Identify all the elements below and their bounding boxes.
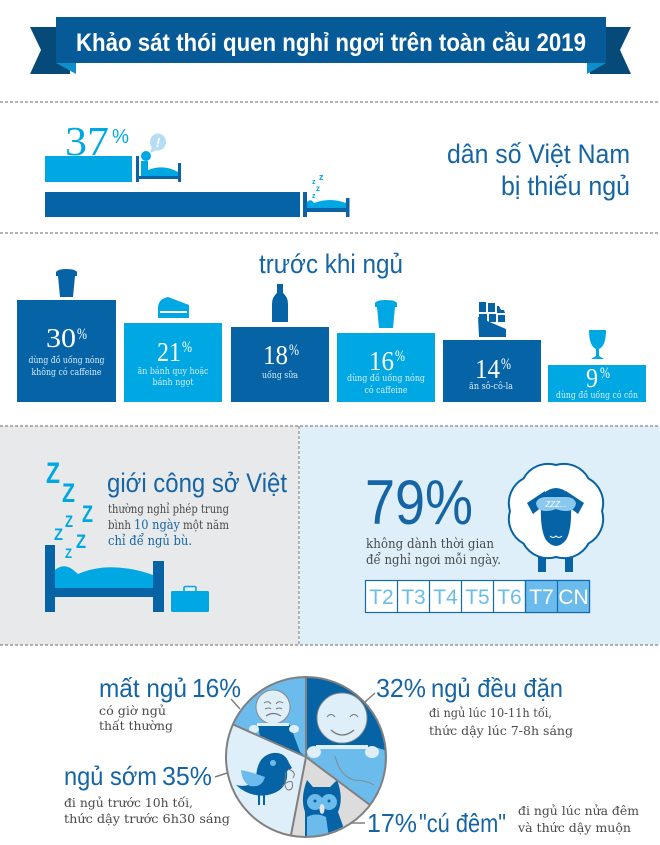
label: night owl 17 percent: đi ngủ lúc nửa đêm xyxy=(518,804,640,818)
text: leave days used for catch-up sleep: thường nghỉ phép trung xyxy=(108,502,229,516)
icon: floating Z letters: Z xyxy=(65,545,72,561)
dark bar full population xyxy=(45,192,300,217)
bar: 21 percent: % xyxy=(182,339,192,356)
heading: Vietnamese office workers: giới công sở Việt xyxy=(107,468,287,498)
icon: hot cup xyxy=(56,269,77,297)
label: regular sleep 32 percent: đi ngủ lúc 10-11h tối, xyxy=(429,705,552,720)
icon: sleeping person in bed: z xyxy=(316,184,320,193)
calendar: weekdays row: T4 xyxy=(433,586,458,609)
panel: 79 percent no rest time xyxy=(300,426,660,645)
wedge: insomnia 16 percent xyxy=(232,677,306,757)
heading: Vietnam population lacks sleep xyxy=(447,139,630,201)
label: night owl 17 percent: "cú đêm" xyxy=(419,808,506,838)
text: leave days used for catch-up sleep xyxy=(108,502,230,549)
icon: floating Z letters: Z xyxy=(54,525,63,544)
heading: Vietnam population lacks sleep: dân số Việt Nam xyxy=(447,139,630,169)
icon: floating Z letters: Z xyxy=(62,478,75,508)
label: night owl 17 percent xyxy=(367,804,640,838)
bar: 18 percent: % xyxy=(289,342,299,359)
icon: wine glass xyxy=(589,330,606,359)
label: insomnia 16 percent: thất thường xyxy=(99,718,173,733)
stat: 79 percent: 79% xyxy=(365,468,473,538)
bar: 14 percent: % xyxy=(501,356,511,373)
icon: chocolate bar xyxy=(478,302,506,337)
bar: 21 percent xyxy=(124,323,222,402)
label: night owl 17 percent: và thức dậy muộn xyxy=(517,821,631,835)
text: no time for daily rest xyxy=(366,537,501,568)
text: leave days used for catch-up sleep: 10 ngày xyxy=(134,518,181,533)
icon: suitcase xyxy=(171,586,209,612)
label: regular sleep 32 percent: 32% xyxy=(376,673,426,703)
label: insomnia 16 percent: 16% xyxy=(192,673,241,703)
heading: before sleep: trước khi ngủ xyxy=(259,249,403,279)
bar: 9 percent xyxy=(548,363,646,402)
label: regular sleep 32 percent: thức dậy lúc 7-8h sáng xyxy=(429,724,573,738)
panel: office workers xyxy=(0,426,299,645)
calendar: weekdays row xyxy=(366,580,590,613)
label: regular sleep 32 percent xyxy=(376,673,573,738)
bar: 9 percent: % xyxy=(600,365,610,382)
bar: 9 percent: 9 xyxy=(586,363,598,393)
chart: sleep type pie xyxy=(215,677,386,838)
icon: large bed xyxy=(45,545,164,612)
label: insomnia 16 percent: mất ngủ xyxy=(99,673,187,703)
bar: 30 percent: không có caffeine xyxy=(32,367,102,378)
bar: 18 percent xyxy=(231,327,329,402)
bar: 16 percent: có caffeine xyxy=(364,385,408,396)
bar: 14 percent: 14 xyxy=(475,354,500,384)
icon: floating Z letters: Z xyxy=(82,501,93,528)
bar: 14 percent: ăn sô-cô-la xyxy=(469,381,513,392)
bar: 16 percent xyxy=(337,333,435,402)
bar: 16 percent: % xyxy=(395,348,405,365)
label: regular sleep 32 percent: ngủ đều đặn xyxy=(431,673,563,703)
text: no time for daily rest: để nghỉ ngơi mỗi ngày. xyxy=(366,552,501,568)
label: night owl 17 percent: 17% xyxy=(367,808,417,838)
bar: 16 percent: dùng đồ uống nóng xyxy=(347,373,425,384)
calendar: weekdays row: T5 xyxy=(465,586,490,609)
panel: 37 percent sleep deprived xyxy=(45,118,630,217)
title text: Khảo sát thói quen nghỉ ngơi trên toàn cầu 2019 xyxy=(76,29,586,57)
icon: cake slice xyxy=(158,297,189,318)
icon: sleeping person in bed: z xyxy=(312,193,316,200)
bar: 21 percent: bánh ngọt xyxy=(152,377,194,388)
bar: 18 percent: uống sữa xyxy=(262,370,298,381)
label: early sleep 35 percent: ngủ sớm xyxy=(64,761,157,791)
bar: 30 percent: 30 xyxy=(46,323,76,353)
icon: sleeping person in bed: z xyxy=(319,172,324,182)
bar: 30 percent xyxy=(17,300,116,402)
bar: 21 percent: 21 xyxy=(157,337,181,367)
label: insomnia 16 percent: có giờ ngủ xyxy=(99,704,166,718)
bar: 14 percent xyxy=(443,340,541,402)
text: leave days used for catch-up sleep: một năm xyxy=(183,518,230,532)
stat: 37 percent xyxy=(65,118,129,164)
calendar: weekdays row: T6 xyxy=(497,586,522,609)
icon: awake person in bed: ! xyxy=(156,135,161,150)
icon: floating Z letters: Z xyxy=(46,457,60,490)
calendar: weekdays row: T7 xyxy=(529,586,554,609)
wedge: night owls 17 percent xyxy=(291,757,370,838)
light bar 37 percent xyxy=(45,156,132,182)
icon: sheep with sleep mask xyxy=(509,464,603,572)
bar: 9 percent: dùng đồ uống có cồn xyxy=(556,390,638,401)
icon: floating Z letters xyxy=(46,457,93,561)
icon: sleeping person in bed xyxy=(303,172,350,217)
icon: sheep with sleep mask: ZZZ... xyxy=(544,500,567,509)
text: leave days used for catch-up sleep: chỉ để ngủ bù. xyxy=(108,533,192,549)
icon: floating Z letters: Z xyxy=(65,512,73,531)
bar: 30 percent: dùng đồ uống nóng xyxy=(28,355,104,366)
label: early sleep 35 percent: 35% xyxy=(162,761,212,791)
bar: 21 percent: ăn bánh quy hoặc xyxy=(138,366,208,377)
label: insomnia 16 percent xyxy=(99,673,241,733)
wedge: regular sleepers 32 percent xyxy=(306,677,386,805)
wedge: early sleepers 35 percent xyxy=(225,724,306,835)
heading: Vietnam population lacks sleep: bị thiếu ngủ xyxy=(501,171,630,201)
icon: sleeping person in bed: z xyxy=(312,179,316,186)
label: early sleep 35 percent: đi ngủ trước 10h tối, xyxy=(64,795,193,810)
bar: 18 percent: 18 xyxy=(263,340,288,370)
icon: cup with caffeine xyxy=(375,300,397,328)
bar: 16 percent: 16 xyxy=(369,346,394,376)
label: early sleep 35 percent: thức dậy trước 6h30 sáng xyxy=(64,812,230,826)
icon: floating Z letters: Z xyxy=(76,532,86,553)
label: early sleep 35 percent xyxy=(64,761,230,826)
calendar: weekdays row: T2 xyxy=(369,586,394,609)
text: no time for daily rest: không dành thời gian xyxy=(366,537,495,552)
chart: before sleep bars xyxy=(17,269,646,402)
title banner xyxy=(30,17,631,74)
stat: 37 percent: % xyxy=(112,126,129,148)
icon: awake person in bed xyxy=(136,134,181,182)
text: leave days used for catch-up sleep: bình xyxy=(108,518,131,532)
icon: milk bottle xyxy=(272,284,288,322)
calendar: weekdays row: T3 xyxy=(401,586,426,609)
bar: 30 percent: % xyxy=(77,326,87,343)
calendar: weekdays row: CN xyxy=(558,586,589,609)
stat: 37 percent: 37 xyxy=(65,118,109,164)
